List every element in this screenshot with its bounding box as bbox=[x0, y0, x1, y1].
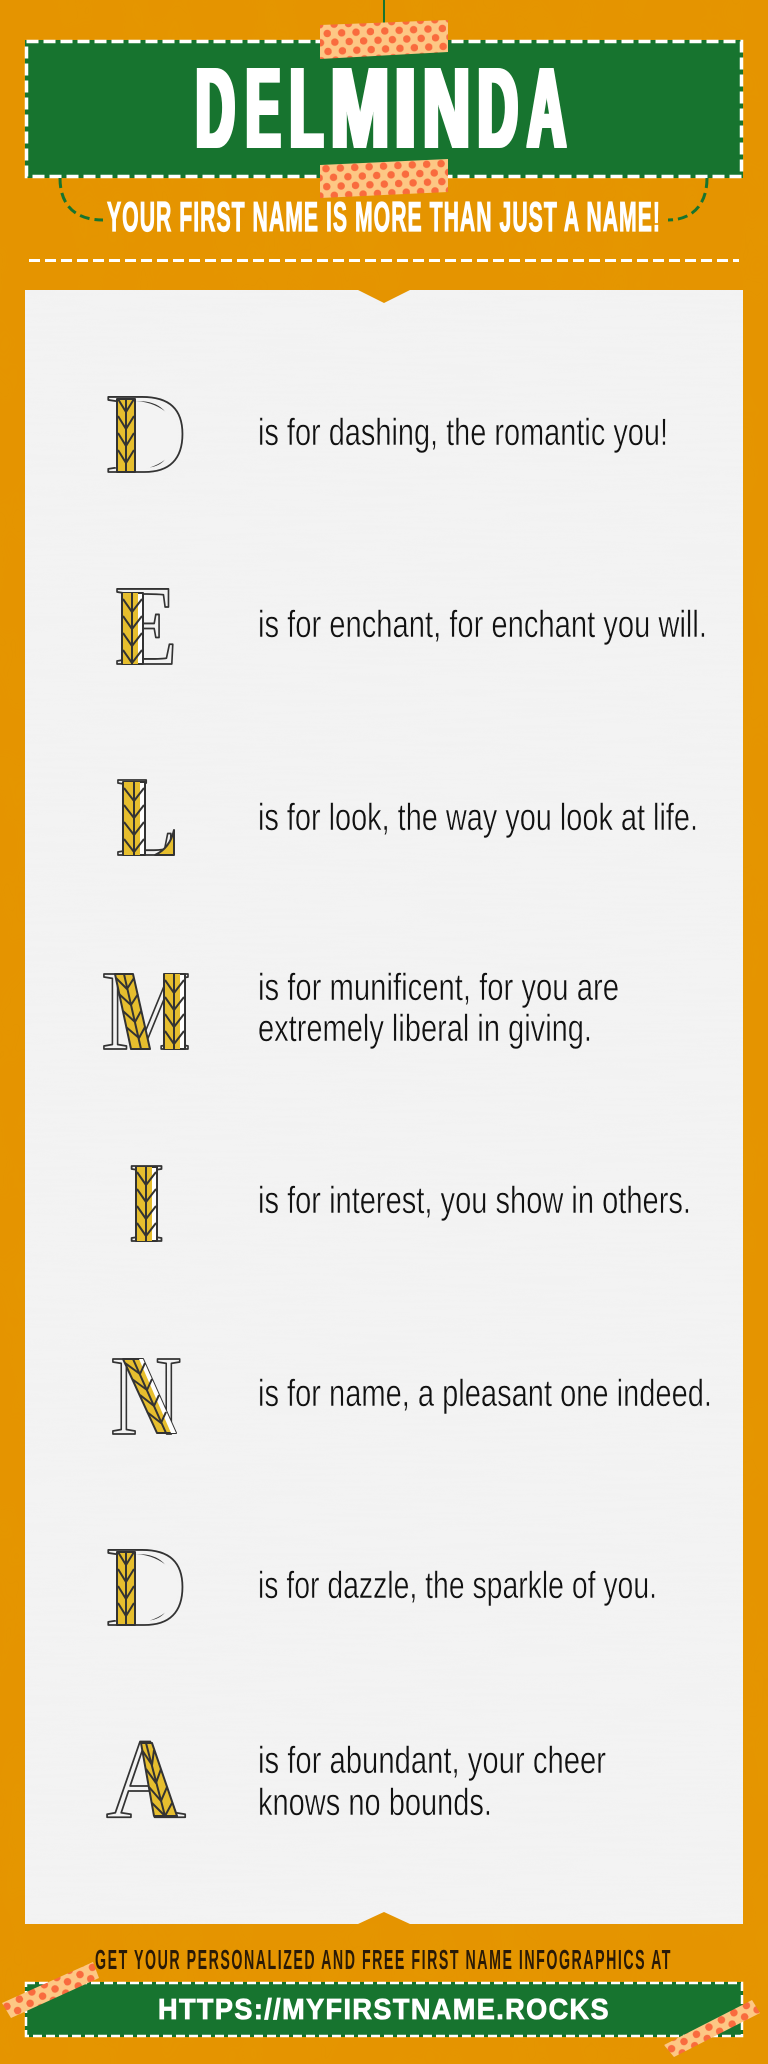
tape: bottom of banner bbox=[320, 159, 448, 198]
letter E: E bbox=[114, 562, 178, 689]
title: D bbox=[196, 45, 235, 171]
tape: footer left bbox=[2, 1962, 99, 2018]
title: N bbox=[423, 45, 470, 171]
title: I bbox=[394, 45, 417, 171]
letter L: L bbox=[115, 753, 177, 880]
title: E bbox=[246, 45, 280, 171]
curly connector right bbox=[668, 178, 707, 220]
letter I: I bbox=[128, 1139, 166, 1266]
letter D: D bbox=[105, 370, 187, 497]
text: M: is for munificent, for you are bbox=[258, 967, 619, 1009]
hanging line bbox=[383, 0, 385, 24]
curly connector left bbox=[60, 178, 103, 220]
title banner bbox=[25, 40, 743, 178]
text: M: extremely liberal in giving. bbox=[258, 1008, 592, 1050]
letter D second: D bbox=[105, 1523, 187, 1650]
footer url: HTTPS://MYFIRSTNAME.ROCKS bbox=[158, 1994, 610, 2026]
text: A bbox=[258, 1740, 606, 1824]
title: M bbox=[330, 45, 390, 171]
panel: letters bbox=[25, 290, 743, 1924]
letter A: A bbox=[106, 1715, 186, 1842]
text: A: knows no bounds. bbox=[258, 1782, 492, 1824]
text: M bbox=[258, 967, 619, 1050]
tape: footer right bbox=[664, 2000, 760, 2057]
tape: top bbox=[320, 20, 448, 59]
text: A: is for abundant, your cheer bbox=[258, 1740, 606, 1782]
title: L bbox=[290, 45, 323, 171]
letter N: N bbox=[110, 1332, 182, 1459]
letter M: M bbox=[101, 947, 191, 1074]
title banner: A bbox=[528, 45, 566, 171]
title: D bbox=[478, 45, 518, 171]
footer banner bbox=[25, 1982, 743, 2037]
